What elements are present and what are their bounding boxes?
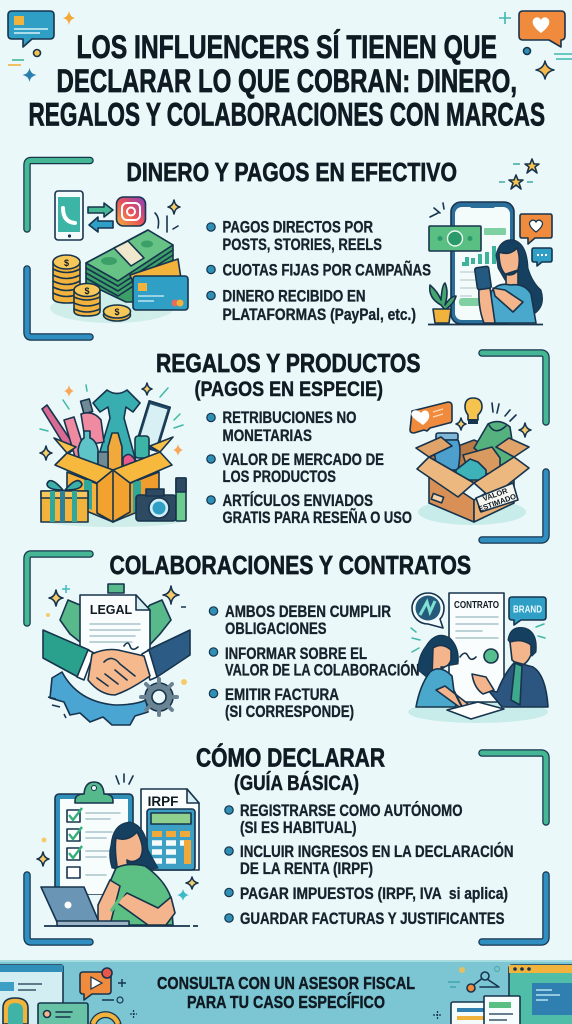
heading: colaboraciones y contratos: COLABORACIONES Y CONTRATOS (110, 550, 471, 580)
list: section two bullets (207, 408, 412, 527)
panel: regalos y productos (40, 348, 546, 540)
illustration: woman filing taxes (37, 774, 199, 926)
illustration: signing a contract: CONTRATO (454, 599, 499, 611)
heading: dinero y pagos en efectivo: DINERO Y PAGOS EN EFECTIVO (126, 157, 457, 187)
panel: colaboraciones y contratos (27, 550, 548, 725)
list: section four bullets: DE LA RENTA (IRPF) (240, 859, 373, 878)
icon: blue chat bubble (8, 11, 54, 47)
frame: section four brackets (27, 753, 546, 942)
list: section one bullets: POSTS, STORIES, REELS (222, 235, 382, 254)
heading: cómo declarar: (GUÍA BÁSICA) (234, 772, 359, 795)
heading: cómo declarar (196, 743, 385, 795)
icon: footer right devices (433, 965, 572, 1024)
list: section three bullets: (SI CORRESPONDE) (225, 702, 354, 721)
list: section two bullets: LOS PRODUCTOS (222, 467, 336, 486)
list: section two bullets: VALOR DE MERCADO DE (222, 450, 384, 469)
illustration: signing a contract (408, 593, 548, 723)
list: section four bullets: PAGAR IMPUESTOS (IRPF, IVA si aplica) (240, 884, 508, 903)
list: section three bullets: AMBOS DEBEN CUMPLIR (225, 602, 391, 621)
list: section four bullets: (SI ES HABITUAL) (240, 818, 356, 837)
illustration: woman filing taxes: IRPF (148, 794, 178, 809)
list: section two bullets: RETRIBUCIONES NO (222, 408, 356, 427)
panel: dinero y pagos en efectivo (27, 157, 552, 337)
list: section one bullets: CUOTAS FIJAS POR CAMPAÑAS (222, 260, 431, 280)
list: section three bullets: INFORMAR SOBRE EL (225, 644, 367, 663)
illustration: open gift box with products (40, 383, 186, 527)
illustration: cardboard box with estimated value: VALOR (482, 486, 509, 503)
icon: cash, coins and card: $ (64, 258, 69, 268)
heading: regalos y productos: (PAGOS EN ESPECIE) (194, 378, 383, 401)
footer note: PARA TU CASO ESPECÍFICO (187, 991, 385, 1012)
illustration: cardboard box with estimated value (410, 398, 531, 525)
heading: cómo declarar: CÓMO DECLARAR (196, 743, 385, 773)
heading: regalos y productos: REGALOS Y PRODUCTOS (156, 348, 420, 378)
list: section three bullets: VALOR DE LA COLABORACIÓN (225, 661, 420, 680)
frame: section one brackets (27, 160, 90, 337)
illustration: legal handshake with gears: LEGAL (90, 603, 133, 617)
illustration: signing a contract: BRAND (513, 604, 542, 616)
frame: section two brackets (482, 353, 546, 540)
icon: top-left sparkles and dots (8, 11, 75, 82)
title (28, 29, 545, 132)
list: section two bullets: GRATIS PARA RESEÑA O USO (222, 507, 412, 527)
icon: cash, coins and card (50, 230, 188, 323)
list: section one bullets: PAGOS DIRECTOS POR (222, 218, 373, 237)
illustration: cardboard box with estimated value: ESTIMADO (477, 492, 517, 514)
icon: orange heart bubble (519, 11, 565, 47)
panel: cómo declarar (27, 743, 546, 942)
list: section two bullets: MONETARIAS (222, 426, 312, 445)
icon: top-right sparkles and dots (499, 12, 572, 79)
footer note (157, 973, 415, 1012)
list: section two bullets: ARTÍCULOS ENVIADOS (222, 491, 373, 510)
footer note: CONSULTA CON UN ASESOR FISCAL (157, 973, 415, 993)
list: section one bullets: DINERO RECIBIDO EN (222, 287, 366, 306)
footer banner (0, 960, 572, 1024)
list: section four bullets: REGISTRARSE COMO AUTÓNOMO (240, 801, 462, 820)
list: section one bullets (207, 218, 431, 324)
icon: footer left devices (0, 965, 137, 1024)
icon: phone and instagram exchange (55, 191, 180, 240)
list: section three bullets: OBLIGACIONES (225, 619, 326, 638)
illustration: legal handshake with gears (43, 584, 190, 725)
list: section four bullets (225, 801, 514, 928)
list: section three bullets: EMITIR FACTURA (225, 685, 339, 704)
heading: regalos y productos (156, 348, 420, 401)
icon: cash, coins and card: $ (84, 286, 90, 296)
list: section three bullets (209, 602, 420, 721)
icon: cash, coins and card: $ (114, 307, 120, 317)
list: section four bullets: GUARDAR FACTURAS Y JUSTIFICANTES (240, 909, 504, 928)
list: section one bullets: PLATAFORMAS (PayPal, etc.) (222, 305, 416, 324)
frame: section three bracket (27, 554, 90, 623)
illustration: woman with phone and earnings (428, 159, 552, 324)
